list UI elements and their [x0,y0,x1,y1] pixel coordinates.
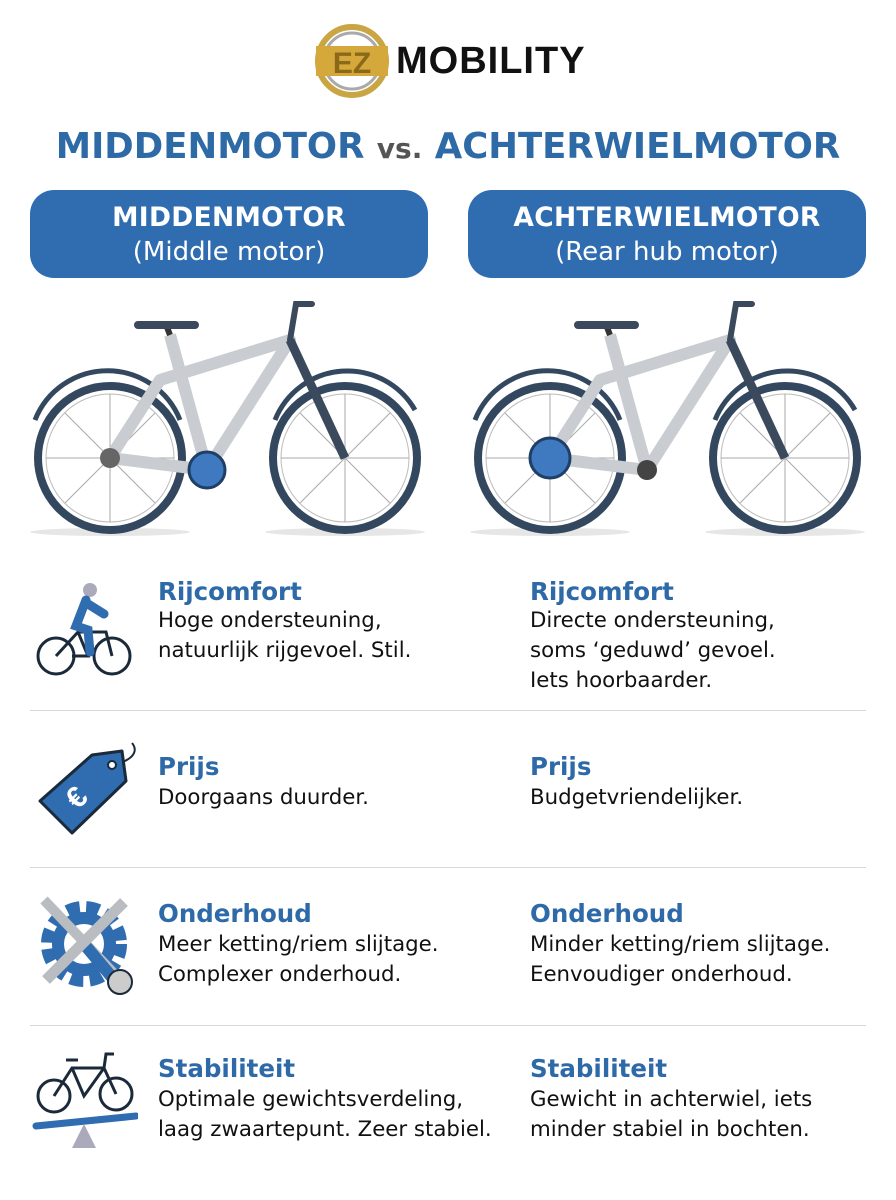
pill: achterwielmotor: (Rear hub motor) [555,237,779,267]
heading: Rijcomfort [530,577,674,606]
text [158,932,439,987]
pill: middenmotor: (Middle motor) [133,237,325,267]
row 1 right [530,577,776,693]
pill: achterwielmotor [468,190,866,278]
text [158,608,411,663]
text: minder stabiel in bochten. [530,1117,810,1142]
text: Optimale gewichtsverdeling, [158,1087,463,1112]
bike: middle motor [30,304,425,536]
text: Gewicht in achterwiel, iets [530,1087,812,1112]
heading: Onderhoud [158,899,312,928]
row 2 left [158,752,369,810]
logo: EZ [333,47,371,80]
bikes illustration [30,301,865,536]
text [530,608,776,693]
row 1 left [158,577,411,663]
text: Iets hoorbaarder. [530,668,712,693]
text: natuurlijk rijgevoel. Stil. [158,638,411,663]
title: MIDDENMOTOR vs. ACHTERWIELMOTOR [56,126,840,167]
bike: rear hub motor [470,304,865,536]
text: Complexer onderhoud. [158,962,401,987]
heading: Prijs [530,752,591,781]
text: Budgetvriendelijker. [530,785,743,810]
row 3 right [530,899,830,987]
row 3 left [158,899,439,987]
icon: balanced bike [32,1052,138,1148]
text: Minder ketting/riem slijtage. [530,932,830,957]
text [530,1087,812,1142]
heading: Prijs [158,752,219,781]
pill: achterwielmotor: ACHTERWIELMOTOR [513,202,821,233]
text: laag zwaartepunt. Zeer stabiel. [158,1117,492,1142]
text [530,932,830,987]
row 4 left [158,1054,492,1142]
icon: price tag: € [59,780,95,816]
text: Directe ondersteuning, [530,608,775,633]
pill: middenmotor [30,190,428,278]
heading: Rijcomfort [158,577,302,606]
pill: middenmotor: MIDDENMOTOR [112,202,346,233]
text: Meer ketting/riem slijtage. [158,932,439,957]
heading: Onderhoud [530,899,684,928]
logo [315,24,586,98]
heading: Stabiliteit [158,1054,295,1083]
text: Eenvoudiger onderhoud. [530,962,793,987]
heading: Stabiliteit [530,1054,667,1083]
icon: tools gear [40,896,133,995]
logo: MOBILITY [396,40,586,82]
text: Hoge ondersteuning, [158,608,382,633]
icon: price tag [38,742,136,835]
text: Doorgaans duurder. [158,785,369,810]
row 2 right [530,752,743,810]
icon: cyclist [36,583,132,676]
text: soms ‘geduwd’ gevoel. [530,638,776,663]
row 4 right [530,1054,812,1142]
text [158,1087,492,1142]
